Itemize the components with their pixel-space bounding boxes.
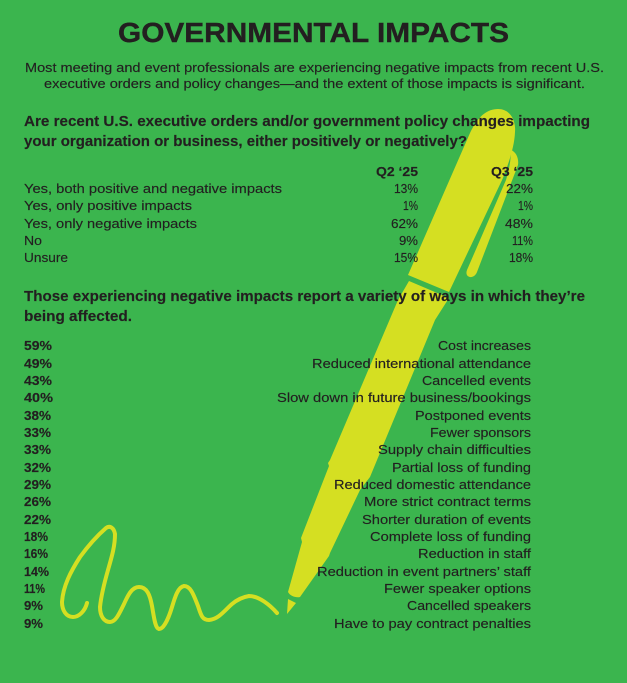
table: Q2 vs Q3 2025 impacts bbox=[24, 165, 533, 265]
list: impact labels: Have to pay contract penalties bbox=[334, 617, 531, 631]
row: no bbox=[24, 234, 533, 248]
list: impact labels: Complete loss of funding bbox=[370, 530, 531, 544]
list: impact labels: Reduced international attendance bbox=[312, 357, 531, 371]
row: no: 11% bbox=[512, 234, 533, 248]
row: only positive: 1% bbox=[403, 199, 418, 213]
list: percentages: 16% bbox=[24, 547, 48, 561]
list: percentages: 59% bbox=[24, 339, 52, 353]
list: percentages: 43% bbox=[24, 374, 52, 388]
list: percentages: 33% bbox=[24, 443, 51, 457]
second heading: Those experiencing negative impacts report a variety of ways in which they’re bbox=[24, 289, 585, 305]
row: both: 22% bbox=[506, 182, 533, 196]
list: percentages: 26% bbox=[24, 495, 51, 509]
intro text bbox=[25, 61, 604, 91]
list: percentages: 29% bbox=[24, 478, 51, 492]
row: only negative bbox=[24, 217, 533, 231]
list: percentages: 9% bbox=[24, 599, 43, 613]
row: unsure: Unsure bbox=[24, 251, 68, 265]
column headers bbox=[376, 165, 533, 179]
intro text: executive orders and policy changes—and the extent of those impacts is significant. bbox=[44, 77, 585, 91]
list: impact labels: Reduction in event partners’ staff bbox=[317, 565, 532, 579]
illustration: yellow pen with signature bbox=[62, 109, 518, 629]
pen tip bbox=[287, 599, 296, 614]
list: impact labels: Partial loss of funding bbox=[392, 461, 531, 475]
row: both: Yes, both positive and negative impacts bbox=[24, 182, 282, 196]
list: impact labels: Cost increases bbox=[438, 339, 531, 353]
list: percentages: 9% bbox=[24, 617, 43, 631]
row: only negative: Yes, only negative impacts bbox=[24, 217, 197, 231]
intro text: Most meeting and event professionals are experiencing negative impacts from recent U.S. bbox=[25, 61, 604, 75]
list: impact labels: More strict contract terms bbox=[364, 495, 531, 509]
list: percentages bbox=[24, 339, 53, 631]
pen clip bbox=[466, 150, 518, 277]
list: impact labels: Supply chain difficulties bbox=[378, 443, 531, 457]
row: only negative: 62% bbox=[391, 217, 418, 231]
list: percentages: 11% bbox=[24, 582, 45, 596]
row: unsure: 18% bbox=[509, 251, 533, 265]
row: no: 9% bbox=[399, 234, 418, 248]
pen barrel lower bbox=[288, 281, 449, 597]
list: percentages: 14% bbox=[24, 565, 49, 579]
row: only positive: 1% bbox=[518, 199, 533, 213]
list: impact labels: Slow down in future business/bookings bbox=[277, 391, 531, 405]
row: both: 13% bbox=[394, 182, 418, 196]
row: only negative: 48% bbox=[505, 217, 533, 231]
row: no: No bbox=[24, 234, 42, 248]
column headers: Q2 ‘25 bbox=[376, 165, 418, 179]
list: percentages: 40% bbox=[24, 391, 53, 405]
row: unsure bbox=[24, 251, 533, 265]
list: impact labels: Fewer sponsors bbox=[430, 426, 531, 440]
list: percentages: 18% bbox=[24, 530, 48, 544]
list: impact labels: Shorter duration of events bbox=[362, 513, 531, 527]
list: impact labels: Cancelled events bbox=[422, 374, 531, 388]
list: impact labels bbox=[277, 339, 532, 631]
list: impact labels: Fewer speaker options bbox=[384, 582, 531, 596]
list: impact labels: Cancelled speakers bbox=[407, 599, 531, 613]
list: percentages: 38% bbox=[24, 409, 51, 423]
second heading: being affected. bbox=[24, 309, 132, 325]
list: percentages: 33% bbox=[24, 426, 51, 440]
question heading bbox=[24, 114, 590, 150]
list: percentages: 49% bbox=[24, 357, 52, 371]
question heading: Are recent U.S. executive orders and/or government policy changes impacting bbox=[24, 114, 590, 130]
second heading bbox=[24, 289, 585, 325]
list: impact labels: Reduction in staff bbox=[418, 547, 532, 561]
row: only positive: Yes, only positive impacts bbox=[24, 199, 192, 213]
row: unsure: 15% bbox=[394, 251, 418, 265]
question heading: your organization or business, either positively or negatively? bbox=[24, 134, 467, 150]
list: percentages: 32% bbox=[24, 461, 51, 475]
row: both bbox=[24, 182, 533, 196]
pen barrel upper bbox=[408, 109, 515, 292]
list: percentages: 22% bbox=[24, 513, 51, 527]
column headers: Q3 ‘25 bbox=[491, 165, 533, 179]
list: impact labels: Reduced domestic attendance bbox=[334, 478, 531, 492]
signature squiggle bbox=[62, 527, 277, 629]
row: only positive bbox=[24, 199, 533, 213]
list: impact labels: Postponed events bbox=[415, 409, 531, 423]
title: GOVERNMENTAL IMPACTS bbox=[118, 17, 509, 48]
